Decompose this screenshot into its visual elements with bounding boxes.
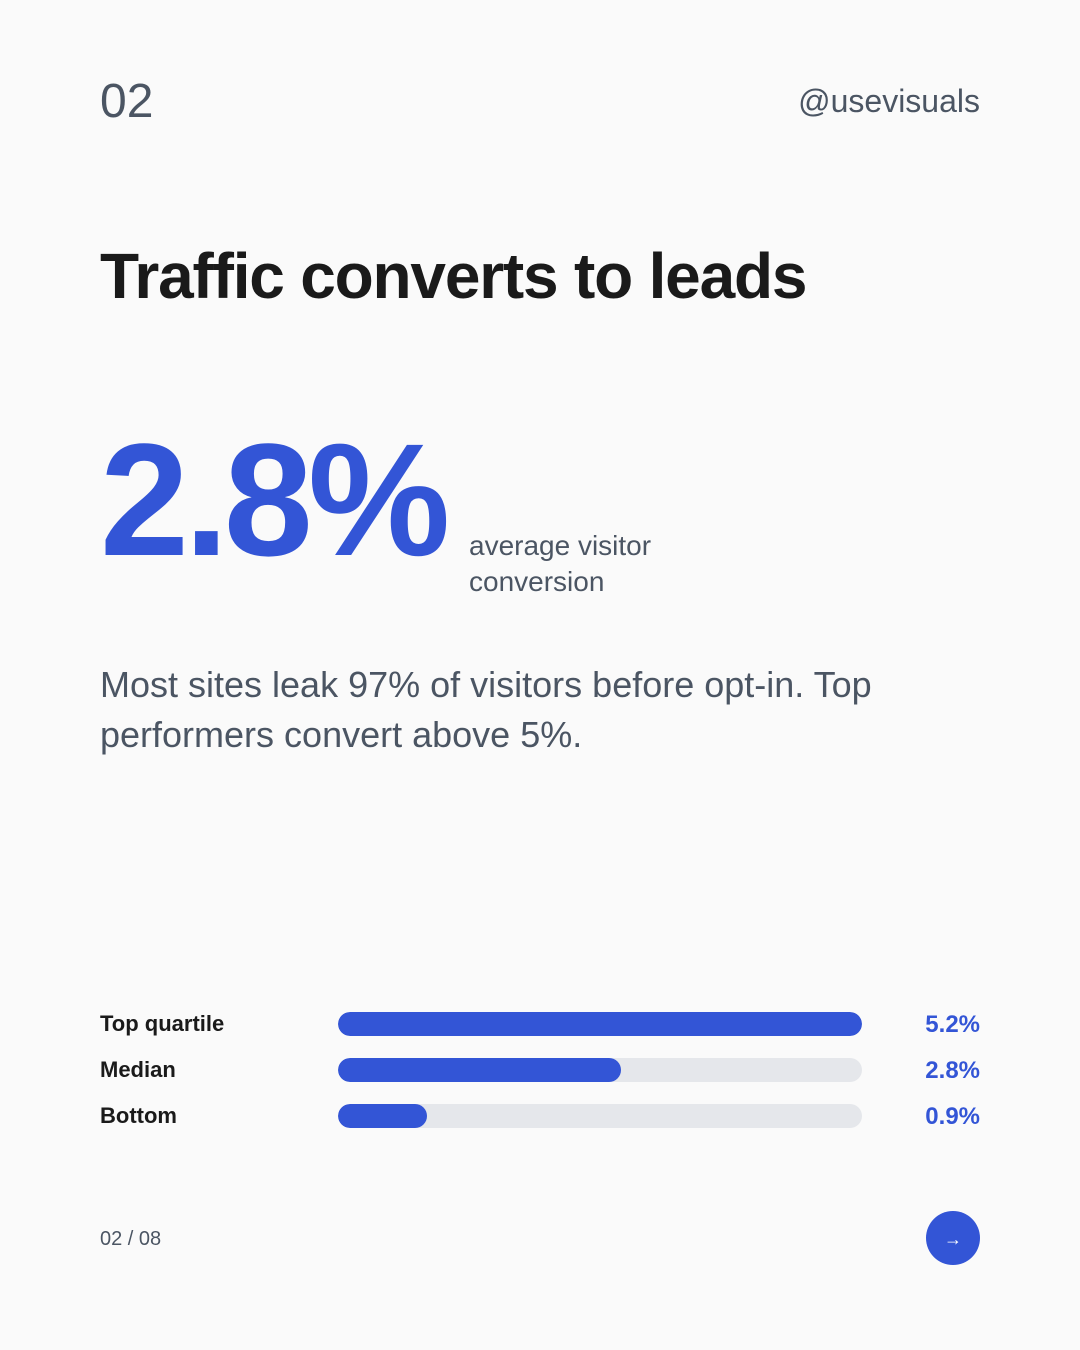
big stat: 2.8% bbox=[100, 410, 446, 589]
page number: 02 bbox=[100, 75, 153, 128]
handle: @usevisuals bbox=[798, 83, 980, 119]
stat caption bbox=[469, 530, 651, 597]
row: bottom: Bottom bbox=[100, 1103, 177, 1128]
icon: next arrow button bbox=[926, 1211, 980, 1265]
icon: next arrow button: → bbox=[944, 1229, 962, 1249]
row: median: 2.8% bbox=[925, 1057, 980, 1084]
row: top quartile: 5.2% bbox=[925, 1011, 980, 1038]
row: median: Median bbox=[100, 1057, 176, 1082]
stat caption: conversion bbox=[469, 566, 604, 597]
row: top quartile bbox=[100, 1011, 980, 1038]
body text: Most sites leak 97% of visitors before opt-in. Top bbox=[100, 664, 872, 705]
row: bottom: 0.9% bbox=[925, 1103, 980, 1130]
stat caption: average visitor bbox=[469, 530, 651, 561]
body text: performers convert above 5%. bbox=[100, 714, 582, 755]
title: Traffic converts to leads bbox=[100, 240, 806, 312]
row: top quartile: Top quartile bbox=[100, 1011, 224, 1036]
body text bbox=[100, 664, 872, 755]
pagination: 02 / 08 bbox=[100, 1228, 161, 1250]
bar chart bbox=[100, 1011, 980, 1130]
